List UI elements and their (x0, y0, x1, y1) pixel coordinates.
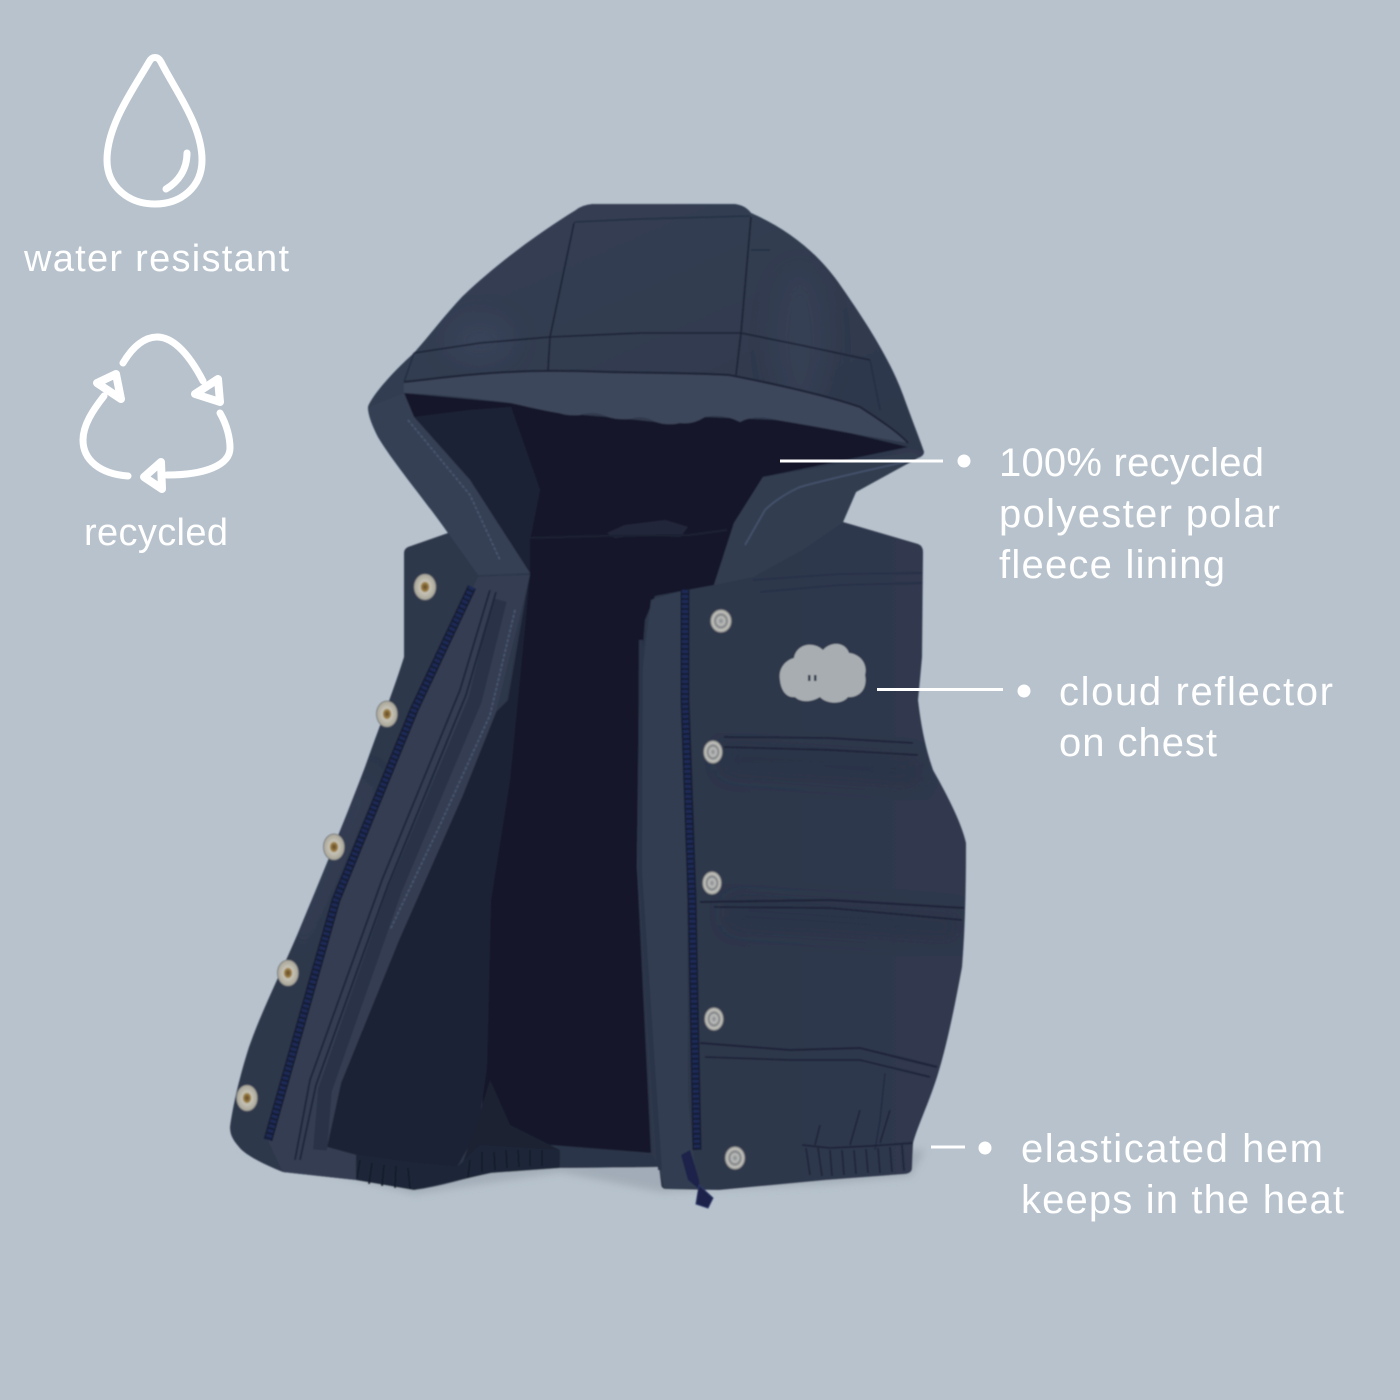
hood interior and centre fleece lining (404, 393, 908, 1153)
right front placket (637, 590, 697, 1189)
callout: elasticated hem: elasticated hem (1021, 1127, 1323, 1171)
hood scalloped rim (404, 371, 908, 443)
left band ribs (295, 590, 496, 1160)
vest ground shadow (240, 1150, 925, 1194)
callout: polyester fleece lining (780, 441, 1280, 587)
hood rim left (368, 393, 530, 575)
hood quilt seams (404, 216, 908, 443)
collar stitching (745, 462, 905, 545)
right hem gathers (806, 1110, 904, 1176)
back lining hem (560, 1150, 659, 1168)
cloud reflector (780, 644, 866, 703)
hood left fleece strip (414, 407, 540, 573)
left band inner stripe (320, 600, 500, 1150)
hood outer shell (368, 204, 924, 452)
label: recycled: recycled (84, 512, 228, 554)
callout: elasticated hem: keeps in the heat (1021, 1178, 1344, 1222)
right panel quilt seams (700, 573, 964, 1150)
icon: water drop (107, 58, 202, 204)
callout: cloud reflector (877, 670, 1333, 765)
zipper pull (681, 1150, 713, 1208)
hood right collar (714, 452, 920, 585)
label: water resistant: water resistant (23, 238, 289, 280)
hood left stitching (408, 420, 500, 560)
icon: recycle arrows (83, 337, 230, 489)
left zipper (268, 587, 472, 1140)
left body front band (268, 575, 530, 1180)
placket shadow seam (640, 640, 660, 1170)
soft shading (426, 207, 810, 505)
callout: polyester fleece lining: fleece lining (999, 543, 1225, 587)
right front zipper (685, 590, 697, 1150)
vest silhouette (230, 204, 966, 1190)
neck loop (607, 520, 688, 538)
callout: cloud reflector: cloud reflector (1059, 670, 1333, 714)
callout: elasticated hem (931, 1127, 1344, 1222)
left snaps (236, 574, 436, 1111)
back hem elastic (356, 1145, 560, 1190)
infographic canvas (24, 54, 1344, 1222)
left body fleece (327, 575, 530, 1167)
lower centre fleece fold (460, 1080, 560, 1170)
callout: polyester fleece lining: polyester polar (999, 492, 1280, 536)
right snaps (702, 610, 745, 1170)
callout: polyester fleece lining: 100% recycled (999, 441, 1264, 485)
callout: cloud reflector: on chest (1059, 721, 1217, 765)
left band stitch (390, 610, 515, 930)
photo: hooded puffer vest (230, 204, 966, 1208)
neck seam (530, 530, 727, 538)
